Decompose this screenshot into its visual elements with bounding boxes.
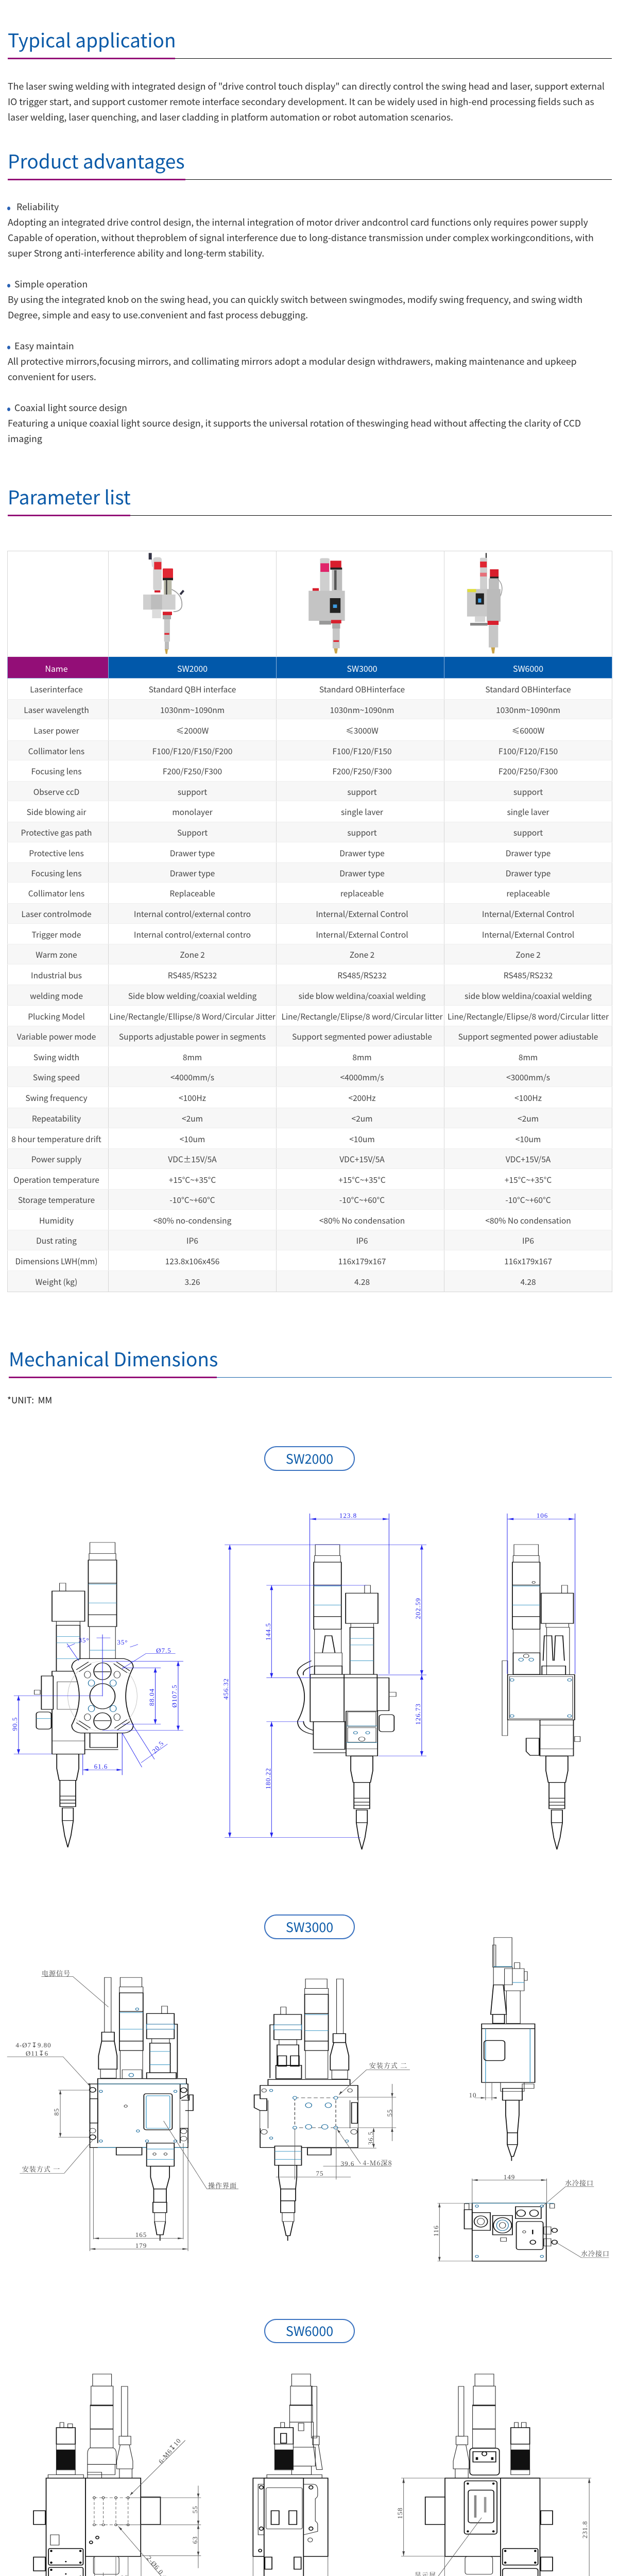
dimension labels: SW2000: 35° xyxy=(78,1636,90,1644)
row: product photos: Observe ccD xyxy=(33,786,79,798)
row: product photos: Drawer type xyxy=(506,868,551,879)
row: product photos: Drawer type xyxy=(339,868,385,879)
row: product photos: 4.28 xyxy=(354,1276,370,1287)
dimension labels: SW3000: 165 xyxy=(135,2231,147,2239)
callouts: SW3000 Chinese labels xyxy=(22,1968,610,2258)
advantage: Reliability xyxy=(8,200,594,260)
row: product photos: VDC+15V/5A xyxy=(506,1154,551,1165)
row: product photos: <200Hz xyxy=(348,1092,376,1104)
dimension labels: SW3000 xyxy=(15,2041,515,2249)
row: product photos: Support segmented power adiustable xyxy=(292,1031,432,1042)
dimension labels: SW6000: 231.8 xyxy=(581,2521,589,2538)
row: product photos: Zone 2 xyxy=(516,949,541,960)
dimension labels: SW2000: 202.59 xyxy=(414,1598,422,1619)
row: product photos: Laser controlmode xyxy=(21,908,92,920)
advantage: Coaxial light source design: imaging xyxy=(8,432,42,445)
row: product photos: <80% No condensation xyxy=(319,1215,405,1226)
row: product photos: -10°C~+60°C xyxy=(339,1194,385,1206)
advantage: Simple operation xyxy=(8,277,582,321)
row: product photos: <80% No condensation xyxy=(485,1215,571,1226)
row: product photos: 8 hour temperature drift xyxy=(11,1133,101,1145)
row: product photos: Internal/External Control xyxy=(316,908,408,920)
row: product photos: Drawer type xyxy=(170,847,215,858)
row: product photos: F200/F250/F300 xyxy=(499,766,558,777)
row: header names: SW6000 xyxy=(513,662,543,674)
button: SW2000 xyxy=(264,1446,355,1471)
row: product photos: Protective gas path xyxy=(21,827,92,838)
dimension labels: SW3000: 85 xyxy=(53,2108,60,2115)
drawing: SW2000 side view with mounting plate xyxy=(14,1543,183,1848)
row: product photos: Focusing lens xyxy=(31,868,81,879)
dimension labels: SW2000 xyxy=(11,1512,548,1789)
dimension labels: SW2000: Ø7.5 xyxy=(156,1647,171,1654)
row: product photos: Internal control/external contro xyxy=(134,928,251,940)
row: product photos: <3000mm/s xyxy=(506,1072,550,1083)
row: product photos: Swing speed xyxy=(33,1072,80,1083)
row: product photos: -10°C~+60°C xyxy=(169,1194,215,1206)
row: product photos: welding mode xyxy=(30,990,83,1002)
row: product photos: Standard OBHinterface xyxy=(485,684,571,695)
text: typical application paragraph: laser welding, laser quenching, and laser cladding in platform automation or robot automation scenarios. xyxy=(8,110,453,124)
row: product photos: Line/Rectangle/Elipse/8 word/Circular litter xyxy=(448,1011,609,1022)
row: product photos: Zone 2 xyxy=(180,949,205,960)
row: product photos: support xyxy=(513,786,543,798)
row: product photos: -10°C~+60°C xyxy=(505,1194,551,1206)
button: SW3000 xyxy=(264,1914,355,1939)
parameter table xyxy=(7,551,612,1292)
row: product photos: <10um xyxy=(180,1133,205,1145)
row: product photos: F100/F120/F150 xyxy=(332,745,392,756)
row: product photos: 1030nm~1090nm xyxy=(496,704,560,715)
dimension labels: SW2000: Ø107.5 xyxy=(170,1685,178,1707)
button: SW6000: SW6000 xyxy=(286,2321,333,2340)
dimension labels: SW2000: 456.32 xyxy=(222,1678,230,1700)
dimension labels: SW2000: 106 xyxy=(537,1512,548,1519)
row: product photos: Internal/External Control xyxy=(316,928,408,940)
row: product photos: 116x179x167 xyxy=(504,1255,552,1266)
row: product photos: single laver xyxy=(507,806,549,818)
heading: Typical application: Typical application xyxy=(8,25,176,53)
row: product photos: +15°C~+35°C xyxy=(169,1174,216,1185)
row: product photos: Collimator lens xyxy=(28,745,84,756)
row: product photos: Storage temperature xyxy=(18,1194,95,1206)
text: unit note: *UNIT: MM xyxy=(7,1393,52,1406)
row: product photos: Laser wavelength xyxy=(24,704,89,715)
row: product photos: Zone 2 xyxy=(350,949,374,960)
row: product photos: side blow weldina/coaxial welding xyxy=(299,990,425,1002)
row: product photos: ≤6000W xyxy=(512,724,544,736)
row: product photos: RS485/RS232 xyxy=(168,970,217,981)
heading: Product advantages: Product advantages xyxy=(8,146,185,174)
row: product photos: Line/Rectangle/Elipse/8 word/Circular litter xyxy=(281,1011,443,1022)
row: product photos: RS485/RS232 xyxy=(504,970,553,981)
advantage: Reliability: Capable of operation, without theproblem of signal interference due to long-distance transmission under complex workingconditions, with xyxy=(8,231,594,244)
row: product photos: Operation temperature xyxy=(13,1174,99,1185)
dimension labels: SW2000: 35° xyxy=(117,1638,128,1646)
dimension labels: SW3000: Ø11↧6 xyxy=(26,2049,48,2057)
row: header names: SW2000 xyxy=(177,662,208,674)
advantage: Reliability: Reliability xyxy=(16,200,59,213)
callouts: SW3000 Chinese labels: 电源信号 xyxy=(42,1968,71,1978)
row: product photos: <100Hz xyxy=(514,1092,542,1104)
advantage: Simple operation: Degree, simple and easy to use.convenient and fast process debugging. xyxy=(8,308,308,321)
drawing: SW3000 side view xyxy=(475,1938,535,2161)
drawing: SW2000 rear view xyxy=(502,1514,580,1850)
row: header names: Name xyxy=(45,662,68,674)
row: product photos: Collimator lens xyxy=(28,888,84,899)
row: product photos: single laver xyxy=(341,806,383,818)
row: product photos: Swing width xyxy=(33,1051,79,1062)
dimension labels: SW3000: 116 xyxy=(432,2225,440,2236)
row: product photos: 8mm xyxy=(519,1051,538,1062)
row: product photos: 8mm xyxy=(183,1051,202,1062)
row: product photos: IP6 xyxy=(356,1235,368,1246)
row: product photos: RS485/RS232 xyxy=(337,970,387,981)
row: product photos: Dimensions LWH(mm) xyxy=(15,1255,97,1266)
row: product photos: Laserinterface xyxy=(30,684,83,695)
row: product photos: Laser power xyxy=(33,724,79,736)
dimension labels: SW2000: 144.5 xyxy=(264,1623,272,1640)
text: typical application paragraph: The laser swing welding with integrated design of "drive control touch display" can directly control the swing head and laser, support external xyxy=(8,79,605,93)
row: product photos: Line/Rectangle/Ellipse/8 Word/Circular Jitter xyxy=(109,1011,276,1022)
row: product photos: Industrial bus xyxy=(31,970,82,981)
row: product photos: Power supply xyxy=(31,1154,81,1165)
button: SW6000 xyxy=(264,2319,355,2343)
dimension labels: SW6000 xyxy=(96,2436,589,2576)
text: typical application paragraph: IO trigger start, and support customer remote interface secondary development. It can be widely used in high-end processing fields such as xyxy=(8,95,594,108)
row: product photos: F200/F250/F300 xyxy=(163,766,222,777)
row: product photos: IP6 xyxy=(186,1235,198,1246)
row: product photos: Focusing lens xyxy=(31,766,81,777)
button: SW3000: SW3000 xyxy=(286,1918,333,1936)
button: SW2000: SW2000 xyxy=(286,1449,333,1468)
drawing: SW6000 right view xyxy=(401,2374,591,2576)
row: product photos: 4.28 xyxy=(520,1276,536,1287)
drawing: SW6000 rear view xyxy=(253,2374,328,2576)
row: product photos: VDC±15V/5A xyxy=(168,1154,217,1165)
advantage: Simple operation: By using the integrated knob on the swing head, you can quickly switch between swingmodes, modify swing frequency, and swing width xyxy=(8,293,582,306)
dimension labels: SW2000: 180.22 xyxy=(264,1768,272,1789)
row: product photos: <4000mm/s xyxy=(170,1072,214,1083)
photo: SW2000 head xyxy=(143,553,184,654)
photo: SW3000 head xyxy=(308,558,345,653)
drawing: SW6000 left view xyxy=(33,2374,201,2576)
photo: SW6000 head xyxy=(467,553,502,653)
row: product photos: Side blowing air xyxy=(27,806,86,818)
advantage: Coaxial light source design: Coaxial light source design xyxy=(14,401,127,414)
row: product photos: Weight (kg) xyxy=(36,1276,77,1287)
row: product photos: Supports adjustable power in segments xyxy=(119,1031,266,1042)
dimension labels: SW3000: 4-Ø7↧9.80 xyxy=(15,2041,52,2049)
dimension labels: SW3000: 149 xyxy=(504,2173,515,2181)
row: product photos: Internal control/external contro xyxy=(134,908,251,920)
dimension labels: SW3000: 75 xyxy=(316,2170,323,2177)
advantage: Easy maintain: All protective mirrors,focusing mirrors, and collimating mirrors adopt a modular design withdrawers, making maintenance and upkeep xyxy=(8,354,577,368)
row: product photos: 123.8x106x456 xyxy=(165,1255,219,1266)
dimension labels: SW3000: 10 xyxy=(469,2091,477,2099)
row: product photos: support xyxy=(347,786,377,798)
drawing: SW3000 front view xyxy=(7,1977,238,2251)
row: product photos: 3.26 xyxy=(184,1276,200,1287)
advantage: Easy maintain: Easy maintain xyxy=(14,339,74,352)
advantage: Reliability: super Strong anti-interference ability and long-term stability. xyxy=(8,246,264,260)
row: product photos: 8mm xyxy=(352,1051,372,1062)
row: product photos: Standard QBH interface xyxy=(149,684,236,695)
row: product photos: 1030nm~1090nm xyxy=(160,704,225,715)
row: product photos: 116x179x167 xyxy=(338,1255,386,1266)
callouts: SW3000 Chinese labels: 4-M6深8 xyxy=(363,2158,392,2167)
row: product photos: <2um xyxy=(182,1113,203,1124)
callouts: SW3000 Chinese labels: 安装方式 一 xyxy=(22,2164,60,2174)
advantage: Coaxial light source design xyxy=(8,401,581,445)
row: product photos: Internal/External Control xyxy=(482,908,574,920)
advantage: Reliability: Adopting an integrated drive control design, the internal integration of motor driver andcontrol card functions only requires power supply xyxy=(8,215,588,229)
advantage: Coaxial light source design: Featuring a unique coaxial light source design, it supports the universal rotation of theswinging head without affecting the clarity of CCD xyxy=(8,416,581,430)
heading: Parameter list: Parameter list xyxy=(8,482,131,510)
row: product photos: <80% no-condensing xyxy=(153,1215,231,1226)
row: product photos: Dust rating xyxy=(36,1235,77,1246)
row: product photos: +15°C~+35°C xyxy=(505,1174,552,1185)
row: product photos: IP6 xyxy=(522,1235,534,1246)
row: header names: SW3000 xyxy=(347,662,377,674)
drawing: SW3000 rear view xyxy=(254,1979,410,2241)
row: product photos: <10um xyxy=(349,1133,375,1145)
row: header names xyxy=(8,657,612,678)
dimension labels: SW2000: 88.04 xyxy=(148,1688,156,1706)
dimension labels: SW2000: 20.5 xyxy=(150,1739,165,1755)
dimension labels: SW3000: 179 xyxy=(135,2242,147,2249)
dimension labels: SW6000: 55 xyxy=(191,2506,199,2513)
row: product photos xyxy=(8,657,612,1287)
row: product photos: Standard OBHinterface xyxy=(319,684,405,695)
dimension labels: SW3000: 55 xyxy=(386,2109,393,2116)
row: product photos: Drawer type xyxy=(170,868,215,879)
row: product photos: replaceable xyxy=(340,888,384,899)
dimension labels: SW2000: 61.6 xyxy=(94,1762,108,1770)
row: product photos: <100Hz xyxy=(179,1092,206,1104)
row: product photos: Repeatability xyxy=(32,1113,81,1124)
row: product photos: support xyxy=(347,827,377,838)
callouts: SW3000 Chinese labels: 操作界面 xyxy=(208,2180,237,2190)
row: product photos: monolayer xyxy=(172,806,213,818)
dimension labels: SW6000: 63 xyxy=(191,2536,199,2544)
advantage: Easy maintain: convenient for users. xyxy=(8,370,96,383)
row: product photos: ≤3000W xyxy=(346,724,379,736)
dimension labels: SW3000: 39.6 xyxy=(341,2160,354,2167)
text: typical application paragraph xyxy=(8,79,605,124)
product photos xyxy=(143,553,502,654)
row: product photos: Support segmented power adiustable xyxy=(458,1031,598,1042)
dimension labels: SW2000: 126.73 xyxy=(414,1703,422,1725)
row: product photos: F100/F120/F150 xyxy=(499,745,558,756)
row: product photos: support xyxy=(178,786,207,798)
row: product photos: Swing frequency xyxy=(25,1092,88,1104)
dimension labels: SW3000: 36.5 xyxy=(367,2131,374,2145)
row: product photos: +15°C~+35°C xyxy=(338,1174,386,1185)
row: product photos: Trigger mode xyxy=(31,928,81,940)
callouts: SW3000 Chinese labels: 安装方式 二 xyxy=(369,2060,407,2070)
row: product photos: support xyxy=(513,827,543,838)
callouts: SW3000 Chinese labels: 水冷接口 xyxy=(581,2248,610,2258)
row: product photos: Support xyxy=(177,827,208,838)
advantage: Easy maintain xyxy=(8,339,577,383)
row: product photos: Side blow welding/coaxial welding xyxy=(128,990,256,1002)
row: product photos: 1030nm~1090nm xyxy=(330,704,394,715)
advantage: Simple operation: Simple operation xyxy=(14,277,88,291)
dimension labels: SW6000: 6-M6↧10 xyxy=(157,2436,183,2465)
callouts: SW3000 Chinese labels: 水冷接口 xyxy=(565,2178,594,2188)
row: product photos: Humidity xyxy=(39,1215,74,1226)
row: product photos: ≤2000W xyxy=(176,724,209,736)
row: product photos: Drawer type xyxy=(506,847,551,858)
dimension labels: SW6000: 158 xyxy=(396,2507,404,2519)
row: product photos: <10um xyxy=(516,1133,541,1145)
row: product photos: <4000mm/s xyxy=(340,1072,384,1083)
drawing: SW3000 bottom view xyxy=(437,2179,609,2261)
row: product photos: <2um xyxy=(518,1113,539,1124)
row: product photos: VDC+15V/5A xyxy=(339,1154,385,1165)
row: product photos: F200/F250/F300 xyxy=(332,766,392,777)
row: product photos: Variable power mode xyxy=(17,1031,96,1042)
heading: Mechanical Dimensions: Mechanical Dimensions xyxy=(9,1344,218,1372)
row: product photos: Plucking Model xyxy=(28,1011,85,1022)
row: product photos: Protective lens xyxy=(29,847,84,858)
row: product photos: F100/F120/F150/F200 xyxy=(152,745,232,756)
row: product photos: Drawer type xyxy=(339,847,385,858)
row: product photos: Replaceable xyxy=(169,888,215,899)
row: product photos: side blow weldina/coaxial welding xyxy=(465,990,592,1002)
dimension labels: SW2000: 123.8 xyxy=(339,1512,357,1519)
dimension labels: SW2000: 90.5 xyxy=(11,1717,19,1731)
row: product photos: replaceable xyxy=(506,888,550,899)
row: product photos: Internal/External Control xyxy=(482,928,574,940)
row: product photos: Warm zone xyxy=(36,949,77,960)
drawing: SW2000 front view xyxy=(225,1514,426,1850)
row: product photos: <2um xyxy=(352,1113,372,1124)
